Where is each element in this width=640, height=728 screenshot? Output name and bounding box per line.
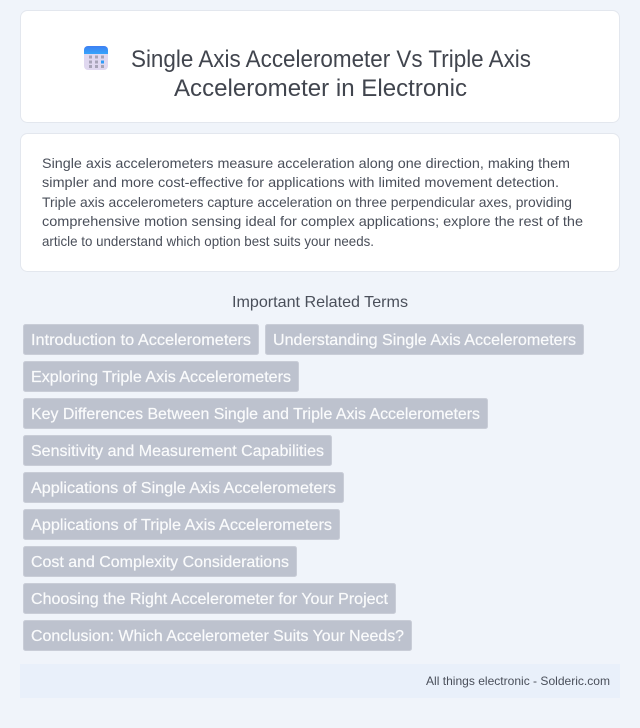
text block: introduction: simpler and more cost-effective for applications with limited movement detection.	[42, 174, 559, 190]
tag: introduction	[24, 324, 258, 354]
tag: understanding single axis: Understanding Single Axis Accelerometers	[273, 332, 576, 349]
tag: conclusion	[24, 620, 412, 650]
tag: sensitivity	[24, 436, 332, 466]
title	[131, 46, 531, 102]
footer text: All things electronic - Solderic.com	[426, 674, 610, 688]
tag: applications single: Applications of Single Axis Accelerometers	[31, 480, 336, 497]
title: Accelerometer in Electronic	[174, 75, 467, 102]
tag: key differences: Key Differences Between Single and Triple Axis Accelerometers	[31, 406, 480, 423]
tag: key differences	[24, 398, 488, 428]
text block: introduction: comprehensive motion sensing ideal for complex applications; explore the rest of the	[42, 213, 583, 229]
heading: related terms: Important Related Terms	[232, 294, 408, 311]
tag: sensitivity: Sensitivity and Measurement Capabilities	[31, 443, 324, 460]
text block: introduction: article to understand which option best suits your needs.	[42, 233, 374, 249]
tag: introduction: Introduction to Accelerometers	[31, 332, 251, 349]
text block: introduction: Triple axis accelerometers capture acceleration on three perpendicular axes, providing	[42, 194, 572, 210]
tag: cost and complexity: Cost and Complexity Considerations	[31, 554, 289, 571]
panel: introduction	[20, 134, 620, 272]
title: Single Axis Accelerometer Vs Triple Axis	[131, 46, 531, 73]
tag: exploring triple axis: Exploring Triple Axis Accelerometers	[31, 369, 291, 386]
text block: introduction	[42, 155, 583, 249]
panel: header	[20, 10, 620, 122]
tag: applications triple: Applications of Triple Axis Accelerometers	[31, 517, 332, 534]
text block: introduction: Single axis accelerometers measure acceleration along one direction, making them	[42, 155, 570, 171]
tag: exploring triple axis	[24, 362, 298, 392]
tag: understanding single axis	[266, 324, 584, 354]
tag: applications single	[24, 472, 344, 502]
icon: calendar grid	[84, 46, 108, 70]
tag: choosing: Choosing the Right Accelerometer for Your Project	[31, 591, 389, 608]
tag: choosing	[24, 584, 396, 614]
footer bar	[20, 664, 620, 698]
tag: conclusion: Conclusion: Which Accelerometer Suits Your Needs?	[31, 628, 404, 645]
tag: cost and complexity	[24, 546, 296, 576]
tag: applications triple	[24, 510, 340, 540]
tag list: related terms	[24, 324, 584, 650]
